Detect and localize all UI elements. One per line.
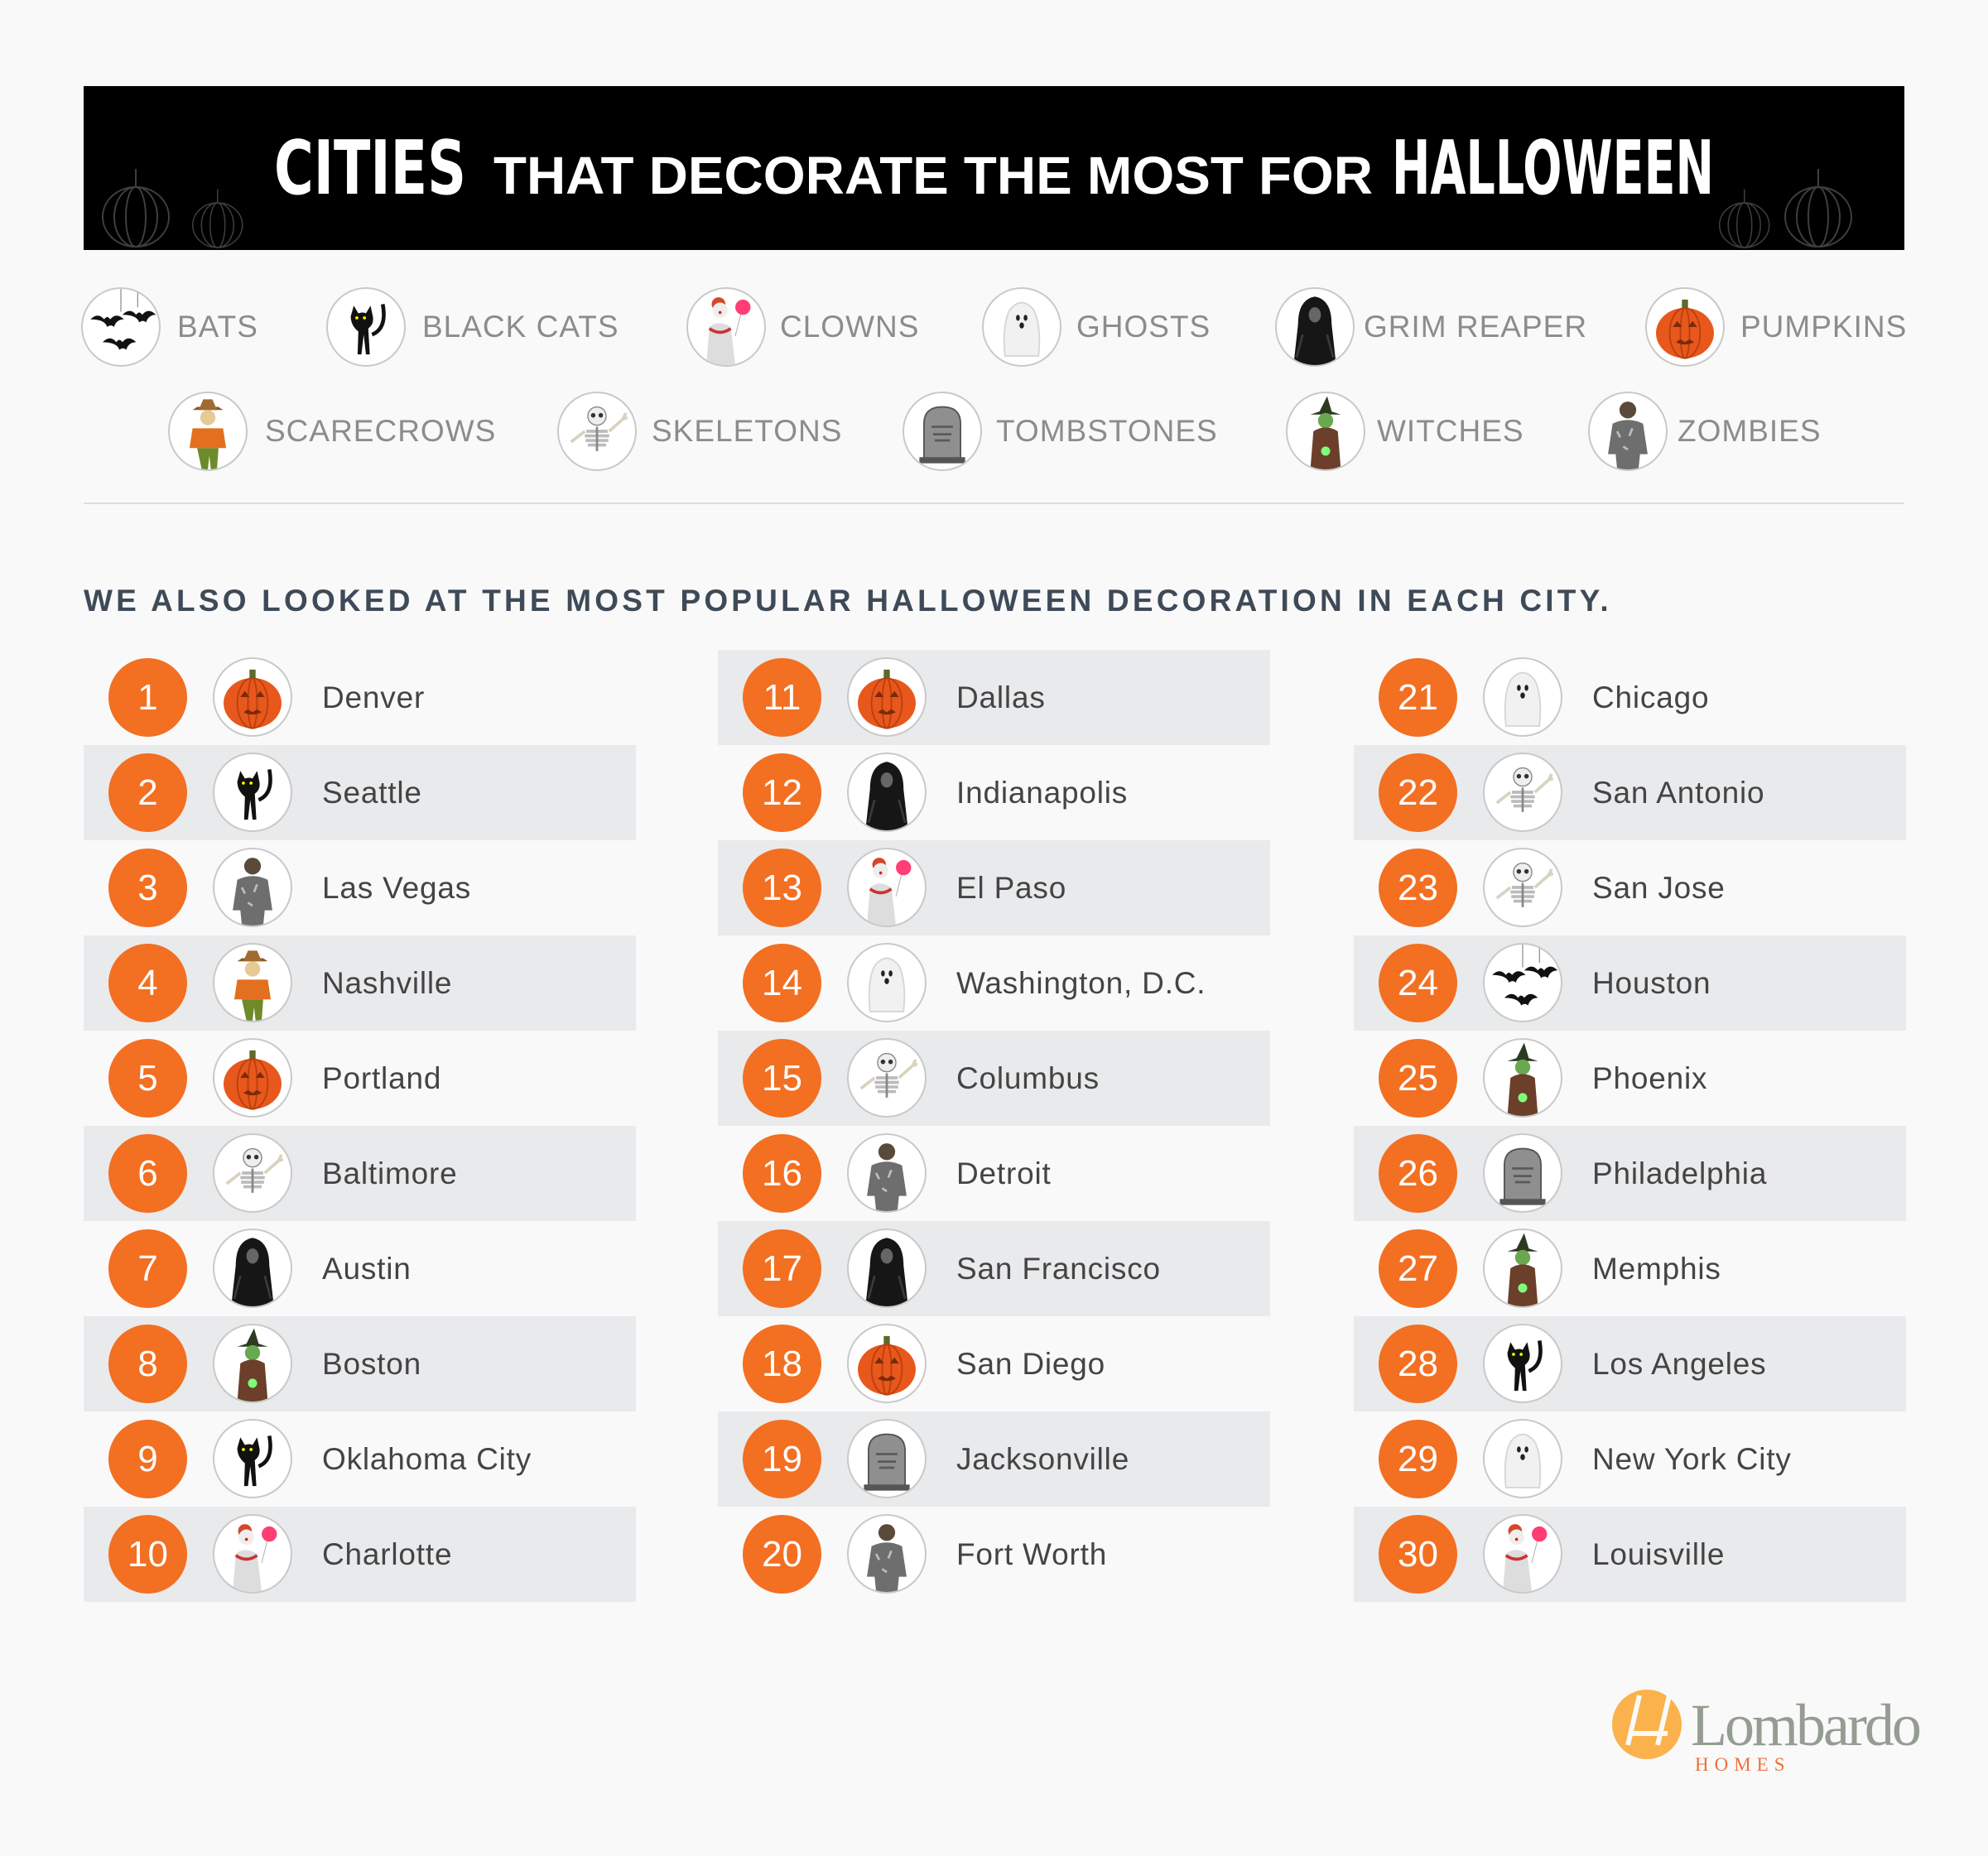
- row 4: Nashville: [322, 966, 452, 1000]
- row 23: San Jose: [1592, 871, 1726, 905]
- row 22: [1354, 745, 1906, 840]
- row 17: 17: [762, 1248, 802, 1289]
- row 24: [1354, 935, 1906, 1031]
- row 12: Indianapolis: [956, 776, 1128, 810]
- row 20: [743, 1514, 1107, 1594]
- row 21: [1379, 657, 1709, 737]
- row 30: 30: [1398, 1534, 1438, 1575]
- legend: tombstones: [903, 392, 1218, 471]
- legend: tombstones: TOMBSTONES: [996, 414, 1218, 448]
- row 21: 21: [1398, 677, 1438, 718]
- row 23: [1379, 848, 1726, 927]
- legend: bats: [81, 287, 258, 367]
- row 19: Jacksonville: [956, 1442, 1129, 1476]
- row 9: Oklahoma City: [322, 1442, 532, 1476]
- row 26: Philadelphia: [1592, 1156, 1767, 1190]
- row 17: [718, 1221, 1270, 1316]
- row 1: [108, 657, 425, 737]
- row 18: [743, 1324, 1105, 1403]
- row 16: [743, 1133, 1052, 1213]
- row 9: [108, 1419, 532, 1498]
- row 6: 6: [137, 1153, 158, 1194]
- row 13: El Paso: [956, 871, 1066, 905]
- row 13: [718, 840, 1270, 935]
- row 14: Washington, D.C.: [956, 966, 1206, 1000]
- row 14: 14: [762, 963, 802, 1003]
- icon: logo mark: [1612, 1690, 1682, 1759]
- row 16: 16: [762, 1153, 802, 1194]
- icon: pumpkins right: [1719, 169, 1852, 248]
- row 30: [1354, 1507, 1906, 1602]
- legend: grim reaper: GRIM REAPER: [1364, 310, 1587, 344]
- row 11: 11: [763, 677, 801, 718]
- row 1: Denver: [322, 680, 425, 714]
- row 3: 3: [137, 868, 158, 908]
- legend: ghosts: [982, 287, 1211, 367]
- row 4: 4: [137, 963, 158, 1003]
- legend: scarecrows: [168, 392, 496, 471]
- row 25: [1379, 1038, 1707, 1118]
- column 1 ranking: [84, 657, 636, 1602]
- row 17: San Francisco: [956, 1252, 1161, 1286]
- title banner: [84, 86, 1904, 250]
- logo: [1612, 1690, 1919, 1775]
- column 2 ranking: [718, 650, 1270, 1594]
- legend: clowns: CLOWNS: [780, 310, 919, 344]
- logo subtext: HOMES: [1695, 1754, 1791, 1775]
- legend: zombies: [1588, 392, 1822, 471]
- row 3: Las Vegas: [322, 871, 471, 905]
- row 14: [743, 943, 1206, 1022]
- row 7: [108, 1229, 412, 1308]
- row 8: 8: [137, 1344, 158, 1384]
- row 8: [84, 1316, 636, 1411]
- legend: black cats: BLACK CATS: [422, 310, 619, 344]
- row 6: Baltimore: [322, 1156, 457, 1190]
- row 12: [743, 752, 1128, 832]
- row 18: San Diego: [956, 1347, 1105, 1381]
- row 7: 7: [137, 1248, 158, 1289]
- title: THAT DECORATE THE MOST FOR: [493, 146, 1373, 205]
- row 20: Fort Worth: [956, 1537, 1107, 1571]
- row 28: 28: [1398, 1344, 1438, 1384]
- legend: witches: [1286, 392, 1524, 471]
- row 19: 19: [762, 1439, 802, 1479]
- row 25: Phoenix: [1592, 1061, 1707, 1095]
- row 5: Portland: [322, 1061, 441, 1095]
- row 3: [108, 848, 471, 927]
- title: [274, 125, 1714, 212]
- row 18: 18: [762, 1344, 802, 1384]
- row 16: Detroit: [956, 1156, 1052, 1190]
- row 29: [1379, 1419, 1792, 1498]
- row 10: 10: [128, 1534, 168, 1575]
- row 1: 1: [137, 677, 158, 718]
- legend: witches: WITCHES: [1377, 414, 1524, 448]
- row 2: 2: [137, 772, 158, 813]
- row 2: [84, 745, 636, 840]
- row 24: Houston: [1592, 966, 1711, 1000]
- legend: ghosts: GHOSTS: [1076, 310, 1211, 344]
- legend: grim reaper: [1275, 287, 1587, 367]
- row 4: [84, 935, 636, 1031]
- row 25: 25: [1398, 1058, 1438, 1099]
- row 10: Charlotte: [322, 1537, 452, 1571]
- row 6: [84, 1126, 636, 1221]
- row 22: 22: [1398, 772, 1438, 813]
- row 9: 9: [137, 1439, 158, 1479]
- row 21: Chicago: [1592, 680, 1709, 714]
- row 30: Louisville: [1592, 1537, 1725, 1571]
- row 19: [718, 1411, 1270, 1507]
- title: HALLOWEEN: [1392, 125, 1714, 212]
- row 23: 23: [1398, 868, 1438, 908]
- row 24: 24: [1398, 963, 1438, 1003]
- column 3 ranking: [1354, 657, 1906, 1602]
- icon: pumpkins left: [102, 169, 243, 248]
- legend: pumpkins: [1645, 287, 1907, 367]
- row 5: [108, 1038, 441, 1118]
- row 26: [1354, 1126, 1906, 1221]
- row 5: 5: [137, 1058, 158, 1099]
- row 29: New York City: [1592, 1442, 1792, 1476]
- legend: black cats: [326, 287, 619, 367]
- row 20: 20: [762, 1534, 802, 1575]
- row 11: [718, 650, 1270, 745]
- row 28: [1354, 1316, 1906, 1411]
- row 15: [718, 1031, 1270, 1126]
- row 28: Los Angeles: [1592, 1347, 1766, 1381]
- logo text: Lombardo: [1691, 1692, 1919, 1758]
- legend: clowns: [686, 287, 919, 367]
- row 2: Seattle: [322, 776, 422, 810]
- legend: scarecrows: SCARECROWS: [265, 414, 496, 448]
- row 13: 13: [762, 868, 802, 908]
- row 26: 26: [1398, 1153, 1438, 1194]
- legend: pumpkins: PUMPKINS: [1740, 310, 1907, 344]
- row 8: Boston: [322, 1347, 421, 1381]
- row 27: Memphis: [1592, 1252, 1721, 1286]
- row 7: Austin: [322, 1252, 412, 1286]
- title: CITIES: [274, 125, 466, 212]
- row 22: San Antonio: [1592, 776, 1764, 810]
- legend: skeletons: SKELETONS: [652, 414, 842, 448]
- legend: bats: BATS: [177, 310, 258, 344]
- row 12: 12: [762, 772, 802, 813]
- legend: zombies: ZOMBIES: [1678, 414, 1822, 448]
- row 15: Columbus: [956, 1061, 1100, 1095]
- row 11: Dallas: [956, 680, 1046, 714]
- row 27: 27: [1398, 1248, 1438, 1289]
- subheading: WE ALSO LOOKED AT THE MOST POPULAR HALLOWEEN DECORATION IN EACH CITY.: [84, 584, 1612, 618]
- row 27: [1379, 1229, 1721, 1308]
- row 10: [84, 1507, 636, 1602]
- legend: [81, 287, 1907, 471]
- row 29: 29: [1398, 1439, 1438, 1479]
- legend: skeletons: [557, 392, 842, 471]
- row 15: 15: [762, 1058, 802, 1099]
